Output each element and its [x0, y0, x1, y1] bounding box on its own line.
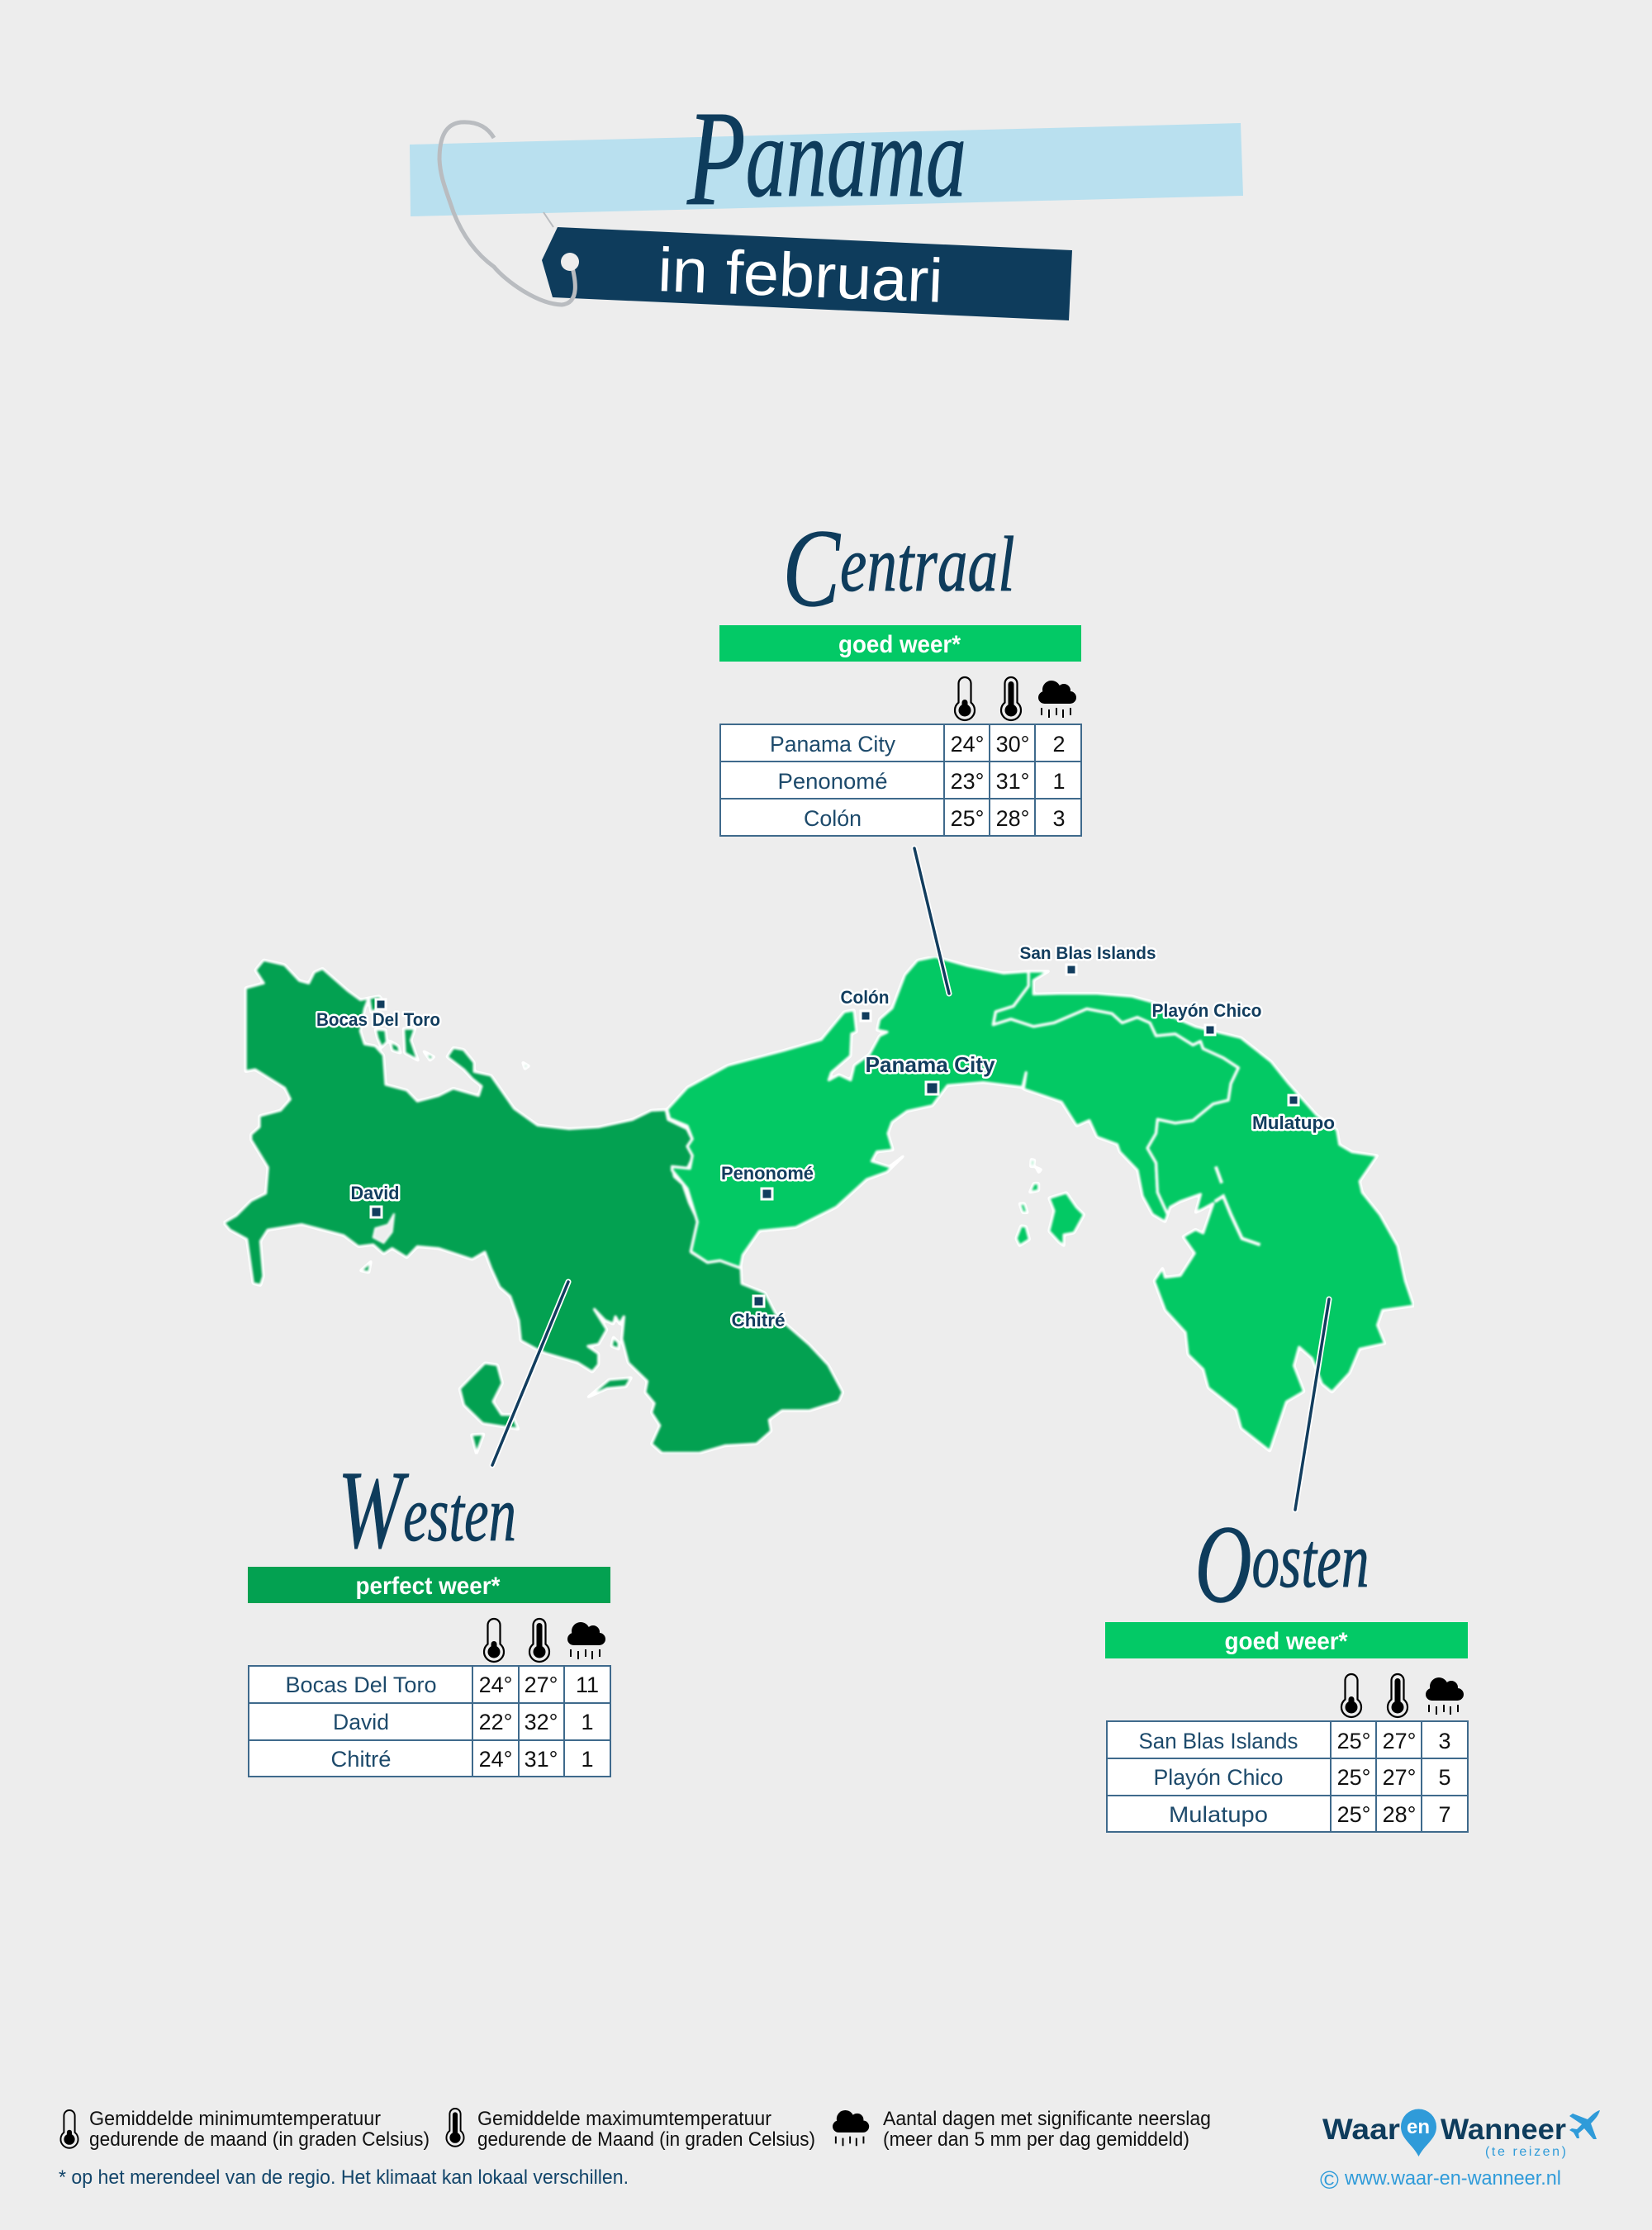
icons	[484, 1619, 605, 1662]
city: Penonomé	[721, 1163, 814, 1199]
region: west	[224, 960, 843, 1454]
city: Panama City	[866, 1052, 995, 1094]
rating bar: perfect weer*	[355, 1573, 501, 1600]
tagline: (te reizen)	[1485, 2145, 1566, 2159]
city: San Blas Islands: San Blas Islands	[1019, 944, 1156, 963]
website	[1320, 2166, 1561, 2194]
island: Coiba	[459, 1363, 519, 1429]
climate table: 5	[1438, 1765, 1451, 1790]
city: David: David	[350, 1183, 400, 1203]
pin with en	[1401, 2109, 1436, 2156]
icon: rain cloud	[833, 2110, 869, 2146]
climate table: 25°	[1337, 1802, 1370, 1827]
climate table: 31°	[996, 769, 1029, 794]
climate table	[720, 724, 1081, 836]
website: ©	[1320, 2166, 1339, 2194]
legend text: minimum temperature: Gemiddelde minimumtemperatuur	[89, 2108, 381, 2130]
city: Chitré	[732, 1296, 785, 1331]
climate table: 11	[576, 1672, 599, 1697]
city: Colón	[841, 987, 889, 1021]
tag string	[439, 122, 575, 305]
climate table: 3	[1052, 806, 1066, 831]
pointer: central	[914, 848, 949, 994]
climate table	[1107, 1721, 1468, 1832]
climate table: 25°	[1337, 1729, 1370, 1753]
pin with en: en	[1407, 2116, 1430, 2138]
climate table: Panama City	[770, 732, 895, 757]
region: east	[993, 971, 1414, 1451]
legend text: precipitation: Aantal dagen met significante neerslag	[883, 2108, 1211, 2130]
city: Bocas Del Toro	[316, 999, 440, 1030]
city: San Blas Islands	[1019, 944, 1156, 975]
climate table: Penonomé	[778, 769, 887, 794]
city: Panama City: Panama City	[866, 1052, 995, 1077]
city: Colón: Colón	[841, 987, 889, 1008]
climate table: 32°	[525, 1710, 558, 1734]
legend	[59, 2108, 1211, 2189]
panel: Oosten	[1105, 1503, 1468, 1832]
climate table: Bocas Del Toro	[286, 1672, 436, 1697]
climate table: 2	[1052, 732, 1066, 757]
gulf inlet	[1215, 1166, 1260, 1245]
light blue band	[410, 123, 1243, 216]
climate table: 3	[1438, 1729, 1451, 1753]
climate table: Mulatupo	[1169, 1802, 1268, 1827]
climate table: 24°	[479, 1747, 512, 1772]
climate table: Chitré	[330, 1747, 392, 1772]
climate table: 24°	[951, 732, 984, 757]
climate table: 23°	[951, 769, 984, 794]
heading: Westen: esten	[403, 1470, 516, 1558]
tag hole	[561, 253, 579, 271]
climate table: San Blas Islands	[1138, 1729, 1298, 1753]
rating bar	[719, 625, 1081, 662]
icon: maximum temperature	[446, 2109, 464, 2147]
climate table: 22°	[479, 1710, 512, 1734]
small islands west	[360, 996, 631, 1454]
city: Playón Chico: Playón Chico	[1151, 1000, 1262, 1021]
city: Playón Chico	[1151, 1000, 1262, 1035]
heading: Oosten: osten	[1252, 1516, 1370, 1604]
map regions	[224, 956, 1414, 1454]
heading: Centraal: C	[783, 507, 841, 630]
legend text: maximum temperature: Gemiddelde maximumtemperatuur	[477, 2108, 771, 2130]
wordmark: Waar: Waar	[1322, 2114, 1400, 2146]
climate table: 25°	[951, 806, 984, 831]
climate table: 24°	[479, 1672, 512, 1697]
rating bar	[248, 1567, 610, 1603]
tag	[542, 227, 1072, 320]
city: Penonomé: Penonomé	[721, 1163, 814, 1184]
title banner	[410, 83, 1243, 320]
icon: minimum temperature	[60, 2110, 78, 2148]
heading: Westen: W	[338, 1449, 409, 1572]
panel: Centraal	[719, 507, 1081, 836]
climate table: Colón	[804, 806, 862, 831]
logo: Waar en Wanneer	[1320, 2109, 1600, 2194]
city: Mulatupo	[1252, 1095, 1335, 1133]
pointer: west	[492, 1282, 568, 1465]
climate table: 7	[1438, 1802, 1451, 1827]
icon: plane	[1569, 2110, 1600, 2139]
city labels	[316, 944, 1335, 1331]
subtitle: in februari: in februari	[657, 235, 944, 316]
climate table: David	[333, 1710, 389, 1734]
Pearl Islands	[1016, 1160, 1085, 1245]
climate table: 1	[581, 1710, 594, 1734]
legend text: minimum temperature: gedurende de maand (in graden Celsius)	[89, 2128, 430, 2151]
city: Mulatupo: Mulatupo	[1252, 1113, 1335, 1133]
climate table: 27°	[1383, 1729, 1416, 1753]
title: Panama: anama	[746, 93, 966, 221]
legend text: maximum temperature: gedurende de Maand (in graden Celsius)	[477, 2128, 815, 2151]
climate table: 27°	[1383, 1765, 1416, 1790]
climate table: 1	[581, 1747, 594, 1772]
city: Chitré: Chitré	[732, 1310, 785, 1331]
climate table: 31°	[525, 1747, 558, 1772]
heading: Oosten: O	[1194, 1503, 1252, 1626]
city: David	[350, 1183, 400, 1217]
icons	[1341, 1674, 1464, 1717]
legend text: precipitation: (meer dan 5 mm per dag gemiddeld)	[883, 2128, 1189, 2151]
wordmark: Wanneer: Wanneer	[1441, 2114, 1566, 2146]
climate table: 28°	[1383, 1802, 1416, 1827]
icons	[955, 677, 1076, 720]
rating bar	[1105, 1622, 1468, 1658]
footnote: * op het merendeel van de regio. Het klimaat kan lokaal verschillen.	[59, 2166, 629, 2189]
legend text: maximum temperature	[477, 2108, 815, 2151]
city: Bocas Del Toro: Bocas Del Toro	[316, 1009, 440, 1030]
climate table: 30°	[996, 732, 1029, 757]
rating bar: goed weer*	[838, 631, 961, 658]
bay near David	[373, 1213, 394, 1243]
title: Panama: P	[686, 83, 746, 234]
legend text: precipitation	[883, 2108, 1211, 2151]
panel: Westen	[248, 1449, 610, 1777]
pointer: east	[1295, 1299, 1329, 1510]
climate table: 27°	[525, 1672, 558, 1697]
heading: Centraal: entraal	[840, 520, 1014, 608]
map of Panama	[224, 944, 1414, 1454]
climate table: 1	[1052, 769, 1066, 794]
website: www.waar-en-wanneer.nl	[1344, 2167, 1561, 2190]
climate table: 28°	[996, 806, 1029, 831]
climate table: Playón Chico	[1153, 1765, 1284, 1790]
rating bar: goed weer*	[1224, 1628, 1348, 1655]
region: central	[667, 956, 1238, 1268]
legend text: minimum temperature	[89, 2108, 430, 2151]
climate table	[249, 1666, 610, 1777]
climate table: 25°	[1337, 1765, 1370, 1790]
